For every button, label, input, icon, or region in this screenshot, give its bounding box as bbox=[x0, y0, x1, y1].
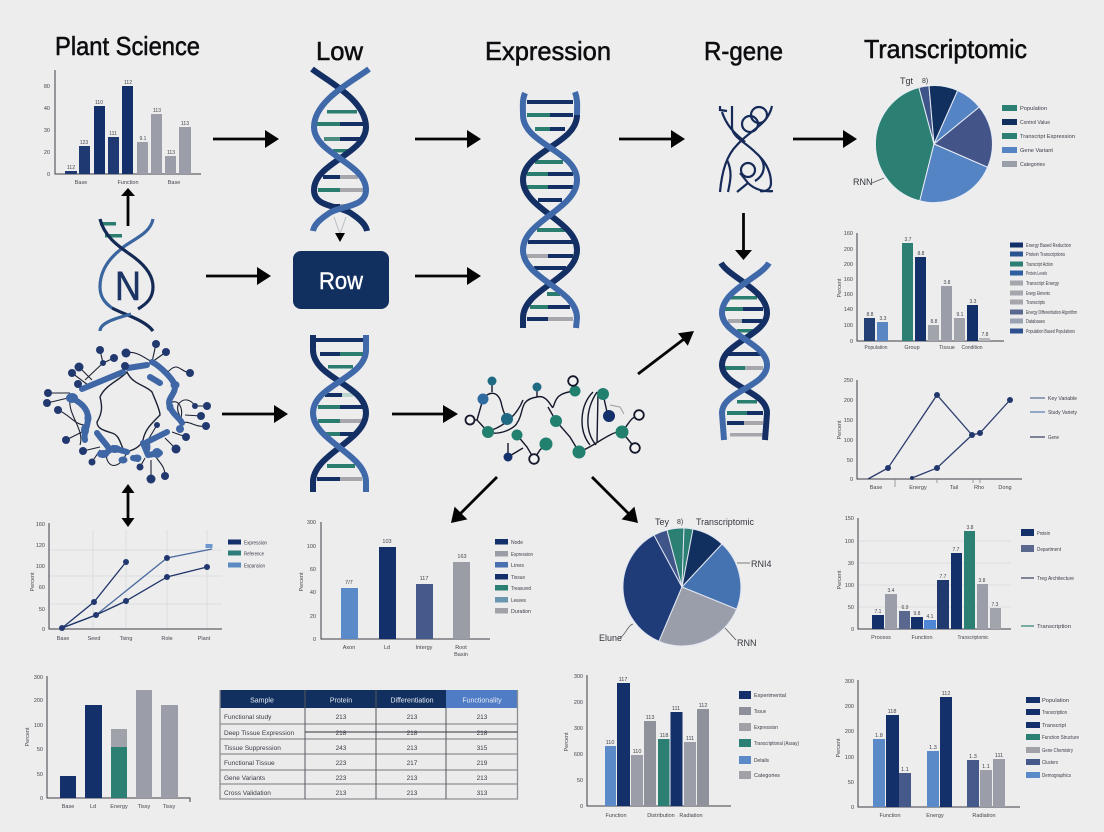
legend: bottom right bar chart: Function Structure bbox=[1042, 735, 1079, 741]
arrow: helix to molecule network bbox=[392, 405, 458, 423]
bar chart: bottom centre: 110 bbox=[633, 749, 641, 755]
bar chart: right upper: Tissue bbox=[939, 345, 955, 351]
bar chart: bottom centre: 113 bbox=[646, 715, 654, 721]
line chart: lower left: 160 bbox=[36, 522, 45, 528]
bar chart: right upper: 3.8 bbox=[944, 280, 951, 286]
table: Differentiation bbox=[390, 698, 434, 704]
legend: right upper bar chart: Protein Levels bbox=[1026, 271, 1047, 277]
title: Transcriptomic: Transcriptomic bbox=[864, 34, 1027, 64]
bar chart: bottom left: Ld bbox=[90, 804, 96, 810]
legend: right upper bar chart: Transcript Action bbox=[1026, 262, 1053, 268]
bar chart: bottom right: 50 bbox=[848, 780, 854, 786]
bar chart: bottom centre: Distribution bbox=[647, 813, 675, 819]
legend: bottom right bar chart: Transcription bbox=[1042, 710, 1067, 716]
legend: Transcriptomic pie: Gene Variant bbox=[1020, 148, 1053, 154]
bar chart: middle: Basin bbox=[454, 652, 468, 658]
legend: right upper bar chart: Energy Elements bbox=[1026, 291, 1050, 297]
bar chart: bottom left: 100 bbox=[34, 723, 43, 729]
bar chart: right lower: 0 bbox=[851, 627, 854, 633]
bar chart: bottom centre: 200 bbox=[574, 700, 583, 706]
bar chart: bottom centre: 111 bbox=[686, 736, 694, 742]
bar chart: bottom left: 0 bbox=[40, 796, 43, 802]
table: 313 bbox=[477, 790, 488, 797]
line chart: lower left: Base bbox=[57, 636, 69, 642]
bar chart: bottom right: 118 bbox=[888, 709, 896, 715]
bar chart: bottom centre: 111 bbox=[672, 706, 680, 712]
bar chart: right lower: 30 bbox=[848, 561, 854, 567]
bar chart: right upper: 8.8 bbox=[867, 312, 874, 318]
bar chart: top left: 111 bbox=[109, 131, 117, 137]
legend: middle bar chart: Node bbox=[511, 540, 523, 546]
pie labels: bottom: Transcriptomic bbox=[696, 517, 754, 527]
bar chart: bottom right: 200 bbox=[845, 704, 854, 710]
bar chart: bottom centre: 110 bbox=[606, 740, 614, 746]
bar chart: middle: Root bbox=[455, 645, 467, 651]
table: 213 bbox=[407, 745, 418, 752]
legend: Transcriptomic pie: Control Value bbox=[1020, 120, 1050, 126]
bar chart: top left: 113 bbox=[181, 121, 189, 127]
arrow: network to right helix bbox=[638, 331, 694, 374]
bar chart: right lower: Percent bbox=[837, 570, 843, 589]
table: 219 bbox=[477, 760, 488, 767]
bar chart: top left: Base bbox=[75, 180, 87, 186]
bar chart: top left: 112 bbox=[67, 165, 75, 171]
bar chart: right lower: Transcriptomic bbox=[958, 635, 989, 641]
bar chart: top left: 123 bbox=[80, 140, 88, 146]
bar chart: top left: 112 bbox=[124, 80, 132, 86]
bar chart: bottom left: 50 bbox=[37, 772, 43, 778]
legend: right upper bar chart: Transcript Energy bbox=[1026, 281, 1059, 287]
bar chart: top left: 80 bbox=[44, 84, 50, 90]
bar chart: right lower: 100 bbox=[845, 539, 854, 545]
bar chart: right upper: Condition bbox=[962, 345, 982, 351]
line chart: right: Base bbox=[870, 485, 882, 491]
line chart: right: Tail bbox=[950, 485, 958, 491]
legend: right line chart bbox=[1030, 396, 1077, 441]
table: 218 bbox=[477, 730, 488, 737]
bar chart: bottom centre: Radiation bbox=[679, 813, 703, 819]
bar chart: right lower: 3.8 bbox=[979, 578, 986, 584]
legend: bottom right bar chart: Transcript bbox=[1042, 723, 1066, 729]
bar chart: bottom right: 112 bbox=[942, 691, 950, 697]
bar chart: right lower: 3.4 bbox=[888, 588, 895, 594]
table: Cross Validation bbox=[224, 790, 271, 797]
arrow: N helix to Row bbox=[206, 267, 271, 285]
bar chart: right upper: 160 bbox=[844, 231, 853, 237]
legend: right upper bar chart: Population Based Populations bbox=[1026, 329, 1075, 335]
molecule network bbox=[466, 376, 644, 464]
bar chart: right upper: 8.8 bbox=[918, 251, 925, 257]
bar chart: right upper: 3.3 bbox=[970, 299, 977, 305]
bar chart: middle: Percent bbox=[299, 572, 305, 591]
line chart: right: 200 bbox=[844, 398, 853, 404]
title: Plant Science: Plant Science bbox=[55, 31, 200, 61]
title: Expression: Expression bbox=[485, 36, 611, 66]
bar chart: bottom left bbox=[25, 675, 190, 810]
bar chart: right lower: Process bbox=[871, 635, 891, 641]
bar chart: bottom right: Energy bbox=[926, 813, 944, 819]
legend: right upper bar chart: Transcripts bbox=[1026, 300, 1045, 306]
bar chart: right lower: 7.7 bbox=[940, 574, 947, 580]
legend: middle bar chart: Lines bbox=[511, 563, 524, 569]
box: Row bbox=[293, 251, 389, 309]
legend: bottom centre bar chart: Details bbox=[754, 758, 769, 764]
legend: bottom right bar chart: Demographics bbox=[1042, 773, 1071, 779]
bar chart: right lower bbox=[837, 516, 1011, 641]
bar chart: bottom centre: 118 bbox=[660, 733, 668, 739]
pie labels: Transcriptomic: 8) bbox=[922, 78, 928, 85]
table: 218 bbox=[407, 730, 418, 737]
dna helix: lower left bbox=[313, 335, 368, 492]
bar chart: right lower: 9.8 bbox=[914, 611, 921, 617]
dna helix: Expression bbox=[523, 92, 577, 328]
legend: bottom centre bar chart bbox=[739, 691, 799, 779]
line chart: lower left: 100 bbox=[36, 564, 45, 570]
bar chart: bottom left: Percent bbox=[25, 727, 31, 746]
bar chart: middle: 103 bbox=[382, 539, 392, 545]
bar chart: bottom right: 300 bbox=[845, 679, 854, 685]
bar chart: bottom right: Function bbox=[879, 813, 901, 819]
legend: right upper bar chart: Databases bbox=[1026, 319, 1045, 325]
bar chart: bottom right: 200 bbox=[845, 729, 854, 735]
bar chart: top left bbox=[44, 70, 201, 186]
dna helix: Low bbox=[312, 69, 369, 242]
line chart: right: 250 bbox=[844, 378, 853, 384]
table: 213 bbox=[477, 775, 488, 782]
bar chart: right lower: 7.1 bbox=[875, 609, 882, 615]
line chart: lower left: Plant bbox=[198, 636, 211, 642]
pie labels: bottom: RNI4 bbox=[751, 559, 772, 569]
legend: right lower bar chart: Transcription bbox=[1037, 624, 1071, 630]
table: Deep Tissue Expression bbox=[224, 730, 294, 737]
bar chart: right lower: Function bbox=[911, 635, 933, 641]
bar chart: bottom left: Energy bbox=[110, 804, 128, 810]
bar chart: middle: Axon bbox=[343, 645, 355, 651]
legend: bottom centre bar chart: Categories bbox=[754, 773, 780, 779]
arrow: chart to Low bbox=[213, 130, 279, 148]
pie labels: Transcriptomic: RNN bbox=[853, 177, 872, 187]
legend: middle bar chart bbox=[495, 539, 533, 615]
pie labels: Transcriptomic: Tgt bbox=[900, 76, 914, 86]
legend: right lower bar chart: Protein bbox=[1037, 531, 1050, 537]
table: Sample bbox=[250, 698, 274, 704]
legend: right line chart: Study Variety bbox=[1048, 410, 1077, 416]
bar chart: bottom centre bbox=[564, 674, 731, 819]
bar chart: top left: 20 bbox=[44, 150, 50, 156]
bar chart: bottom centre: 0 bbox=[580, 804, 583, 810]
table: Functional study bbox=[224, 714, 272, 721]
bar chart: right upper: 100 bbox=[844, 323, 853, 329]
pie labels: bottom: RNN bbox=[737, 638, 756, 648]
table: 315 bbox=[477, 745, 488, 752]
bar chart: middle: 100 bbox=[307, 544, 316, 550]
legend: right lower bar chart: Treg Architecture bbox=[1037, 576, 1074, 582]
bar chart: bottom right: 1.3 bbox=[969, 754, 977, 760]
bar chart: right upper: 200 bbox=[844, 247, 853, 253]
table: 213 bbox=[407, 790, 418, 797]
bar chart: top left: Function bbox=[117, 180, 139, 186]
line chart: right bbox=[837, 378, 1022, 491]
bar chart: top left: 0 bbox=[47, 172, 50, 178]
pie labels: bottom bbox=[599, 517, 772, 648]
table: Protein bbox=[330, 698, 352, 704]
line chart: lower left: Seed bbox=[88, 636, 100, 642]
legend: lower left line chart bbox=[228, 540, 267, 570]
legend: middle bar chart: Duration bbox=[511, 609, 531, 615]
line chart: lower left: 0 bbox=[42, 627, 45, 633]
bar chart: right lower: 4.1 bbox=[927, 614, 934, 620]
title: Low: Low bbox=[316, 36, 363, 66]
bar chart: bottom centre: 300 bbox=[574, 726, 583, 732]
line chart: lower left: Percent bbox=[30, 572, 36, 591]
arrow: R-gene to Transcriptomic bbox=[793, 130, 857, 148]
bar chart: bottom centre: 117 bbox=[619, 677, 627, 683]
arrow: Low to Expression bbox=[415, 130, 481, 148]
legend: Transcriptomic pie: Population bbox=[1020, 106, 1047, 112]
arrow: network to bottom pie bbox=[592, 477, 638, 523]
arrow: N helix up to chart bbox=[121, 188, 135, 226]
bar chart: bottom left: 200 bbox=[34, 698, 43, 704]
line chart: right: 0 bbox=[850, 477, 853, 483]
table bbox=[220, 690, 518, 799]
table: 223 bbox=[336, 760, 347, 767]
line chart: lower left: Tsing bbox=[120, 636, 132, 642]
table: 213 bbox=[336, 714, 347, 721]
line chart: lower left bbox=[30, 522, 222, 642]
bar chart: right upper: Population bbox=[864, 345, 888, 351]
legend: right upper bar chart bbox=[1010, 242, 1077, 335]
bar chart: right upper: 140 bbox=[844, 307, 853, 313]
pie labels: bottom: Tey bbox=[655, 517, 670, 527]
icon: N helix: N bbox=[115, 263, 141, 309]
protein network bbox=[43, 340, 211, 484]
table: 213 bbox=[407, 714, 418, 721]
bar chart: top left: 30 bbox=[44, 128, 50, 134]
bar chart: bottom right: 111 bbox=[995, 753, 1003, 759]
table: Tissue Suppression bbox=[224, 745, 281, 752]
pie labels: Transcriptomic bbox=[853, 76, 928, 187]
bar chart: right lower: 150 bbox=[845, 516, 854, 522]
legend: lower left line chart: Expression bbox=[244, 540, 267, 546]
legend: bottom centre bar chart: Tissue bbox=[754, 709, 766, 715]
pie labels: bottom: Elune bbox=[599, 633, 622, 643]
legend: right lower bar chart: Department bbox=[1037, 547, 1061, 553]
line chart: right: Rho bbox=[974, 485, 984, 491]
bar chart: right upper: 8.8 bbox=[931, 319, 938, 325]
table: Functional Tissue bbox=[224, 760, 275, 767]
bar chart: bottom left: Base bbox=[62, 804, 74, 810]
table: 213 bbox=[336, 790, 347, 797]
legend: bottom right bar chart: Population bbox=[1042, 698, 1069, 704]
arrow: network to mid bar chart bbox=[451, 477, 497, 523]
legend: right lower bar chart bbox=[1021, 529, 1074, 630]
bar chart: right upper: Group bbox=[904, 345, 920, 351]
legend: bottom right bar chart bbox=[1026, 697, 1079, 779]
bar chart: bottom centre: Percent bbox=[564, 732, 570, 751]
bar chart: bottom right: 100 bbox=[845, 755, 854, 761]
title: R-gene: R-gene bbox=[704, 36, 783, 66]
legend: bottom right bar chart: Clusters bbox=[1042, 760, 1058, 766]
bar chart: right upper: 7.8 bbox=[982, 332, 989, 338]
legend: Transcriptomic pie bbox=[1002, 105, 1075, 168]
bar chart: right upper: 3.7 bbox=[905, 237, 912, 243]
legend: bottom centre bar chart: Expression bbox=[754, 725, 778, 731]
bar chart: top left: 113 bbox=[153, 108, 161, 114]
legend: lower left line chart: Reference bbox=[244, 552, 264, 558]
legend: middle bar chart: Treasured bbox=[511, 586, 531, 592]
legend: bottom centre bar chart: Transcriptional (Assay) bbox=[754, 741, 799, 747]
bar chart: middle: 163 bbox=[457, 554, 467, 560]
legend: Transcriptomic pie: Transcript Expression bbox=[1020, 134, 1075, 140]
pie chart: Transcriptomic bbox=[875, 85, 992, 203]
bar chart: middle bbox=[299, 520, 490, 658]
box: Row: Row bbox=[319, 268, 364, 295]
arrow: Row to Expression bbox=[415, 267, 481, 285]
bar chart: top left: 110 bbox=[95, 100, 103, 106]
bar chart: bottom right: 1.1 bbox=[901, 767, 909, 773]
bar chart: top left: 40 bbox=[44, 106, 50, 112]
bar chart: middle: Intergy bbox=[416, 645, 433, 651]
bar chart: bottom centre: 300 bbox=[574, 674, 583, 680]
bar chart: right upper: 200 bbox=[844, 262, 853, 268]
line chart: right: Energy bbox=[909, 485, 927, 491]
legend: middle bar chart: Leaves bbox=[511, 598, 526, 604]
bar chart: right upper: 3.3 bbox=[880, 316, 887, 322]
table: 243 bbox=[336, 745, 347, 752]
bar chart: middle: 300 bbox=[307, 520, 316, 526]
bar chart: middle: 40 bbox=[310, 590, 316, 596]
bar chart: right lower: 6.9 bbox=[902, 605, 909, 611]
bar chart: bottom centre: 600 bbox=[574, 752, 583, 758]
bar chart: right upper: Percent bbox=[837, 278, 843, 297]
legend: right upper bar chart: Protein Transcriptions bbox=[1026, 252, 1065, 258]
bar chart: bottom right: 0 bbox=[851, 805, 854, 811]
icon: N helix bbox=[100, 219, 153, 331]
bar chart: bottom right: 1.3 bbox=[929, 745, 937, 751]
bar chart: bottom right: Percent bbox=[836, 738, 842, 757]
legend: right upper bar chart: Energy Differentiation Algorithm bbox=[1026, 310, 1077, 316]
bar chart: right upper: 160 bbox=[844, 292, 853, 298]
table: Functionality bbox=[462, 698, 502, 704]
line chart: right: 100 bbox=[844, 438, 853, 444]
legend: middle bar chart: Tissue bbox=[511, 575, 525, 581]
bar chart: bottom left: Tissy bbox=[138, 804, 151, 810]
bar chart: right upper: 0 bbox=[850, 339, 853, 345]
line chart: right: Percent bbox=[837, 420, 843, 439]
bar chart: right lower: 3.8 bbox=[967, 525, 974, 531]
bar chart: right lower: 50 bbox=[848, 605, 854, 611]
bar chart: bottom centre: 50 bbox=[577, 778, 583, 784]
arrow: Expression to R-gene bbox=[619, 130, 685, 148]
bar chart: bottom right: 1.1 bbox=[982, 764, 990, 770]
bar chart: bottom centre: Function bbox=[605, 813, 627, 819]
bar chart: top left: 9.1 bbox=[140, 136, 147, 142]
table: 217 bbox=[407, 760, 418, 767]
table: Gene Variants bbox=[224, 775, 266, 782]
line chart: lower left: Role bbox=[161, 636, 173, 642]
bar chart: middle: 0 bbox=[313, 637, 316, 643]
bar chart: top left: Base bbox=[168, 180, 180, 186]
bar chart: bottom right: Radiation bbox=[972, 813, 996, 819]
pie chart: bottom bbox=[623, 528, 741, 646]
legend: middle bar chart: Expression bbox=[511, 552, 533, 558]
bar chart: right lower: 7.7 bbox=[953, 547, 960, 553]
bar chart: bottom centre: 112 bbox=[699, 703, 707, 709]
bar chart: middle: 60 bbox=[310, 567, 316, 573]
table: 213 bbox=[477, 714, 488, 721]
arrow: protein network to helix bbox=[222, 405, 288, 423]
legend: bottom centre bar chart: Experimental bbox=[754, 693, 786, 699]
line chart: lower left: 50 bbox=[39, 607, 45, 613]
line chart: right: 50 bbox=[847, 458, 853, 464]
line chart: right: 150 bbox=[844, 418, 853, 424]
table: 218 bbox=[336, 730, 347, 737]
bar chart: bottom right bbox=[836, 679, 1020, 819]
bar chart: right upper bbox=[837, 231, 1004, 351]
line chart: lower left: 60 bbox=[39, 585, 45, 591]
bar chart: bottom left: 300 bbox=[34, 675, 43, 681]
bar chart: right upper: 160 bbox=[844, 277, 853, 283]
table: 223 bbox=[336, 775, 347, 782]
bar chart: right lower: 7.3 bbox=[992, 602, 999, 608]
bar chart: right upper: 9.1 bbox=[957, 312, 964, 318]
legend: right line chart: Gene bbox=[1048, 435, 1059, 441]
pie labels: bottom: 8) bbox=[677, 519, 683, 526]
legend: Transcriptomic pie: Categories bbox=[1020, 162, 1045, 168]
bar chart: bottom left: Tissy bbox=[163, 804, 176, 810]
arrow: small tip into Row bbox=[334, 217, 346, 242]
dna helix: right bbox=[721, 263, 769, 440]
bar chart: right lower: 100 bbox=[845, 583, 854, 589]
bar chart: middle: 20 bbox=[310, 614, 316, 620]
legend: lower left line chart: Expansion bbox=[244, 564, 265, 570]
legend: right line chart: Key Variable bbox=[1048, 396, 1077, 402]
bar chart: middle: Ld bbox=[384, 645, 390, 651]
icon: R-gene glyph bbox=[720, 106, 773, 192]
bar chart: bottom right: 1.8 bbox=[875, 733, 883, 739]
line chart: right: Dong bbox=[998, 485, 1012, 491]
arrow: R-gene down to helix bbox=[735, 213, 752, 260]
arrow: double headed bbox=[122, 484, 134, 527]
bar chart: top left: 113 bbox=[167, 150, 175, 156]
legend: right upper bar chart: Energy Based Reduction bbox=[1026, 243, 1071, 249]
legend: bottom right bar chart: Gene Chemistry bbox=[1042, 748, 1073, 754]
table: 213 bbox=[407, 775, 418, 782]
line chart: lower left: 120 bbox=[36, 543, 45, 549]
bar chart: middle: 117 bbox=[420, 576, 428, 582]
bar chart: bottom left: 50 bbox=[37, 747, 43, 753]
bar chart: middle: 7/7 bbox=[345, 580, 353, 586]
